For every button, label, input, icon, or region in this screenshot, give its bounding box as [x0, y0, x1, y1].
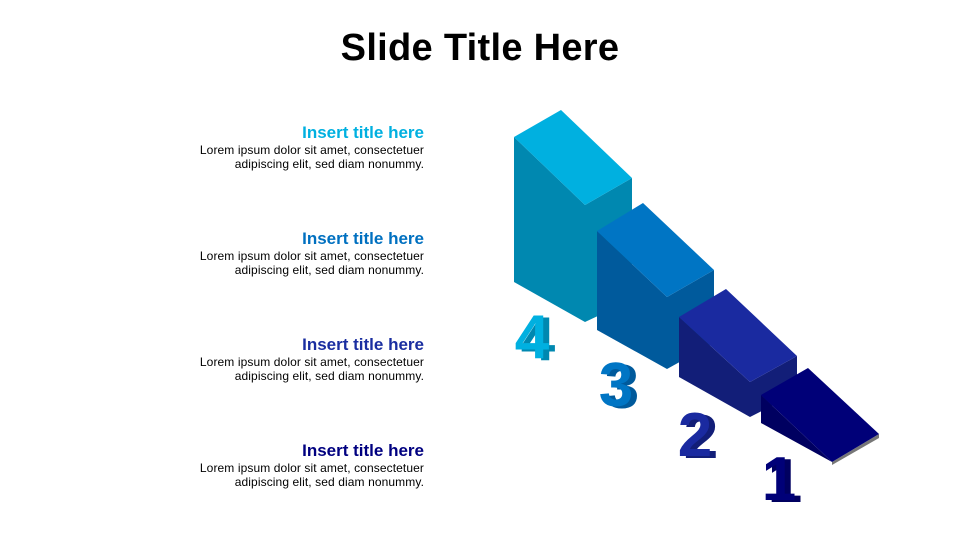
text block 4: Insert title here: [302, 123, 424, 142]
text block 1: Lorem ipsum dolor sit amet, consectetuer: [200, 461, 424, 475]
text block 1: Insert title here: [302, 441, 424, 460]
title: Slide Title Here: [341, 27, 619, 69]
text block 3: Lorem ipsum dolor sit amet, consectetuer: [200, 249, 424, 263]
number 3: 3: [605, 353, 639, 422]
number 2: 2: [684, 403, 718, 472]
text block 4: [200, 123, 424, 171]
number 4: 4: [515, 303, 550, 372]
text block 2: Lorem ipsum dolor sit amet, consectetuer: [200, 355, 424, 369]
number 1: 1: [768, 447, 802, 516]
text block 3: Insert title here: [302, 229, 424, 248]
block 2: [679, 289, 797, 417]
text block 3: adipiscing elit, sed diam nonummy.: [235, 263, 424, 277]
text block 2: Insert title here: [302, 335, 424, 354]
text block 2: adipiscing elit, sed diam nonummy.: [235, 369, 424, 383]
number 1: 1: [762, 445, 796, 514]
number 2: 2: [678, 401, 712, 470]
block 1: [761, 368, 879, 465]
text block 1: adipiscing elit, sed diam nonummy.: [235, 475, 424, 489]
block 3: [597, 203, 714, 369]
text block 4: adipiscing elit, sed diam nonummy.: [235, 157, 424, 171]
text block 1: [200, 441, 424, 489]
number 4: 4: [521, 305, 556, 374]
text block 2: [200, 335, 424, 383]
block 4: [514, 110, 632, 322]
text block 4: Lorem ipsum dolor sit amet, consectetuer: [200, 143, 424, 157]
number 3: 3: [599, 351, 633, 420]
text block 3: [200, 229, 424, 277]
